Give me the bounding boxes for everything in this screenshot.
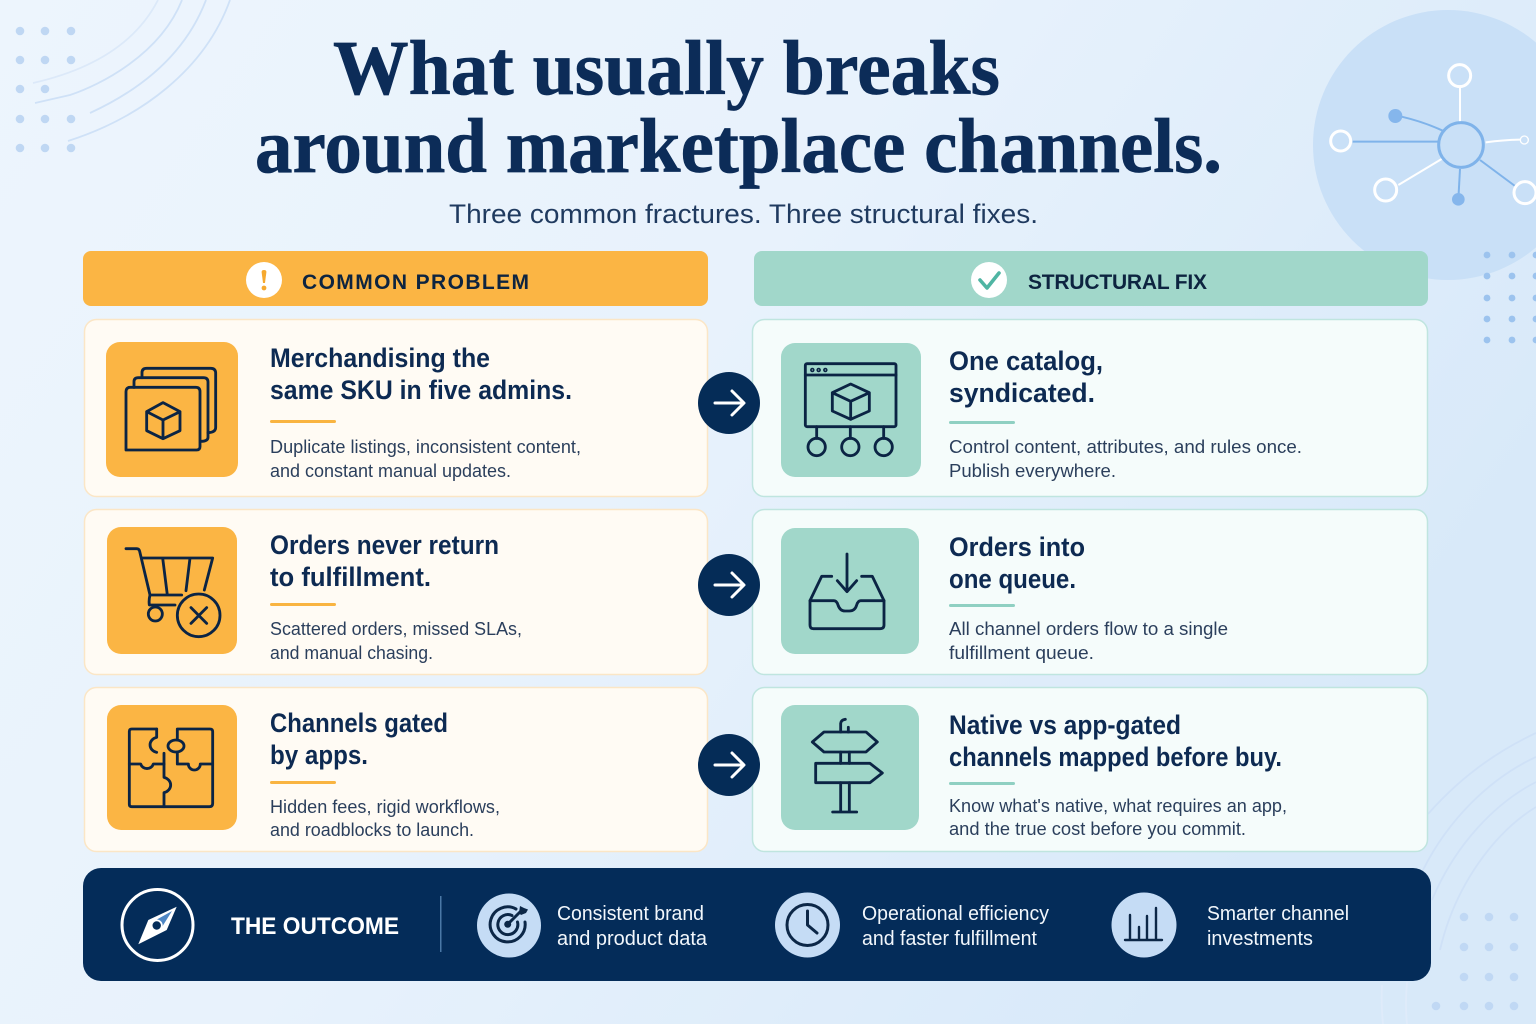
title: around marketplace channels. [255, 103, 1222, 189]
heading: channels mapped before buy. [949, 742, 1282, 772]
description: and manual chasing. [270, 643, 433, 663]
description: Publish everywhere. [949, 461, 1116, 481]
panel: problem 3 [84, 688, 708, 852]
heading: Orders never return [270, 530, 499, 560]
icon: clock [775, 892, 840, 958]
icon: warning [246, 262, 282, 298]
panel: fix 3 [752, 688, 1428, 852]
decoration: bottom-right dots [1432, 913, 1518, 1010]
description [270, 619, 522, 663]
heading: Channels gated [270, 708, 448, 738]
icon: check [971, 262, 1007, 298]
outcome text 3: investments [1207, 928, 1313, 950]
icon: signpost [781, 705, 919, 830]
heading: syndicated. [949, 378, 1095, 408]
outcome text 1 [557, 903, 708, 950]
heading: Orders into [949, 532, 1085, 562]
outcome text 1: Consistent brand [557, 903, 704, 925]
subtitle: Three common fractures. Three structural fixes. [449, 199, 1038, 229]
title: What usually breaks [333, 25, 1000, 111]
heading [949, 710, 1282, 772]
decoration: network diagram [1313, 10, 1536, 280]
arrow: row 1 [698, 372, 760, 434]
decoration: right dots [1484, 252, 1536, 343]
description [270, 437, 581, 481]
outcome text 2: and faster fulfillment [862, 928, 1037, 950]
icon: inbox tray [781, 528, 919, 654]
heading [270, 530, 499, 592]
icon: catalog window [781, 343, 921, 477]
header: structural fix [754, 251, 1428, 306]
description: Know what's native, what requires an app, [949, 796, 1287, 816]
header: structural fix: STRUCTURAL FIX [1028, 271, 1207, 294]
description: fulfillment queue. [949, 643, 1094, 663]
description [949, 619, 1228, 663]
outcome text 2 [862, 903, 1049, 950]
icon: target [477, 894, 541, 958]
description [949, 437, 1302, 481]
decoration: bottom-right arcs [1382, 733, 1536, 1024]
heading: same SKU in five admins. [270, 375, 572, 405]
icon: bar chart [1112, 892, 1176, 958]
icon: puzzle [107, 705, 237, 830]
heading: Merchandising the [270, 343, 490, 373]
decoration: top-left arcs [33, 0, 230, 141]
icon: cart with x [107, 527, 237, 654]
description: Control content, attributes, and rules once. [949, 437, 1302, 457]
heading [270, 708, 448, 770]
description: Hidden fees, rigid workflows, [270, 797, 500, 817]
description [949, 796, 1287, 839]
description [270, 797, 500, 840]
description: and roadblocks to launch. [270, 820, 474, 840]
heading: one queue. [949, 564, 1076, 594]
heading: by apps. [270, 740, 368, 770]
description: Duplicate listings, inconsistent content, [270, 437, 581, 457]
panel: fix 1 [752, 320, 1428, 496]
icon: stacked catalog cards [106, 342, 238, 477]
heading: One catalog, [949, 346, 1103, 376]
icon: compass [122, 890, 193, 960]
outcome text 2: Operational efficiency [862, 903, 1049, 925]
description: Scattered orders, missed SLAs, [270, 619, 522, 639]
heading: to fulfillment. [270, 562, 431, 592]
panel: fix 2 [752, 510, 1428, 674]
panel: problem 1 [84, 320, 708, 496]
panel: outcome bar [83, 868, 1431, 981]
heading: Native vs app-gated [949, 710, 1181, 740]
description: and the true cost before you commit. [949, 819, 1246, 839]
label: the outcome: THE OUTCOME [231, 913, 399, 940]
description: All channel orders flow to a single [949, 619, 1228, 639]
arrow: row 2 [698, 554, 760, 616]
outcome text 3 [1207, 903, 1349, 950]
description: and constant manual updates. [270, 461, 511, 481]
heading [949, 346, 1103, 408]
arrow: row 3 [698, 734, 760, 796]
panel: problem 2 [84, 510, 708, 674]
title [255, 25, 1222, 189]
outcome text 1: and product data [557, 928, 708, 950]
header: common problem: COMMON PROBLEM [302, 271, 529, 294]
heading [949, 532, 1085, 594]
heading [270, 343, 572, 405]
decoration: top-left dots [16, 27, 75, 152]
outcome text 3: Smarter channel [1207, 903, 1349, 925]
header: common problem [83, 251, 708, 306]
